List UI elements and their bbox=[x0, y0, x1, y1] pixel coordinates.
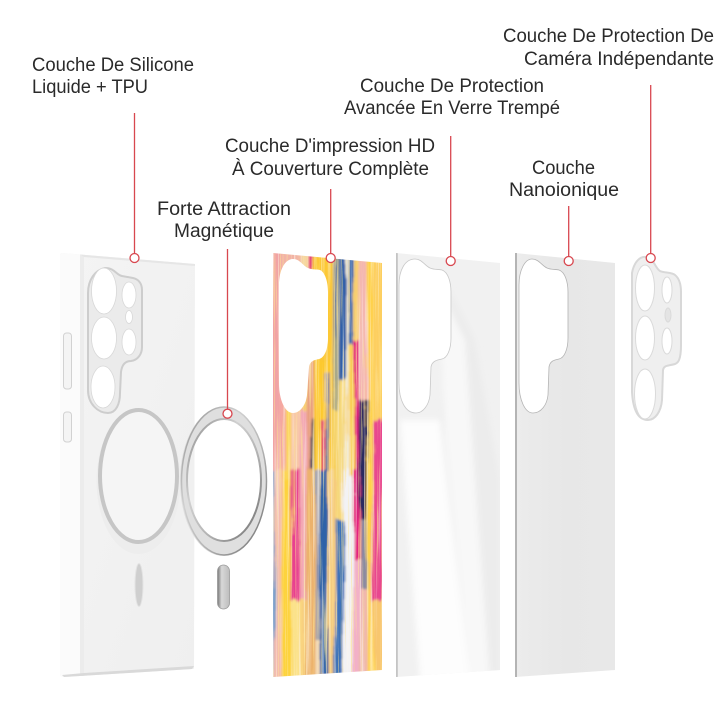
panel: silicone and TPU phone case bbox=[60, 253, 195, 677]
volume button bbox=[64, 333, 72, 389]
glass sheet with reflections bbox=[396, 250, 501, 680]
panel: HD print layer bbox=[273, 253, 382, 677]
case top lip bbox=[80, 254, 195, 266]
label bbox=[225, 136, 435, 180]
fine gold brush streaks bbox=[273, 253, 382, 677]
case bottom lip bbox=[62, 666, 194, 677]
lens frame bbox=[632, 257, 681, 420]
panel: tempered glass layer bbox=[396, 250, 501, 680]
print camera cutout bbox=[279, 259, 328, 413]
callout: tempered glass bbox=[344, 76, 560, 266]
label bbox=[503, 26, 714, 70]
label: Nanoionique bbox=[509, 180, 619, 201]
panel: camera protection layer bbox=[632, 257, 681, 420]
leader line bbox=[446, 136, 455, 266]
callout: camera protection bbox=[503, 26, 714, 262]
label: Couche De Silicone bbox=[32, 55, 194, 76]
metal ring bbox=[180, 407, 266, 556]
magnetic slot on case bbox=[135, 564, 143, 606]
panel: nano-ionic layer bbox=[515, 253, 615, 677]
label: À Couverture Complète bbox=[232, 159, 429, 180]
case side band bbox=[60, 253, 80, 677]
label: Magnétique bbox=[174, 221, 274, 242]
metal pill bbox=[218, 565, 230, 609]
label bbox=[157, 199, 291, 242]
case edge shading bbox=[80, 254, 84, 676]
case body bbox=[60, 253, 195, 677]
leader line bbox=[223, 249, 232, 418]
film sheet bbox=[515, 253, 615, 677]
camera holes bbox=[91, 268, 136, 408]
callout: HD print bbox=[225, 136, 435, 262]
lens holes bbox=[634, 265, 672, 419]
label: Liquide + TPU bbox=[32, 77, 148, 98]
glass camera cutout bbox=[399, 259, 451, 413]
painted stripes bbox=[273, 253, 382, 677]
callout: magnetic attraction bbox=[157, 199, 291, 418]
camera island bbox=[88, 268, 142, 413]
label: Forte Attraction bbox=[157, 199, 291, 220]
callout: silicone case bbox=[32, 55, 194, 262]
leader line bbox=[326, 189, 335, 262]
leader line bbox=[130, 113, 139, 262]
label: Couche De Protection bbox=[360, 76, 544, 97]
leader line bbox=[646, 85, 655, 262]
callout: nano-ionic bbox=[509, 158, 619, 266]
leader line bbox=[564, 206, 573, 266]
power button bbox=[64, 412, 72, 442]
film camera cutout bbox=[519, 259, 568, 413]
label: Couche De Protection De bbox=[503, 26, 714, 47]
panel: magnetic ring bbox=[180, 407, 266, 609]
label: Couche bbox=[532, 158, 595, 179]
magnetic recess on case bbox=[96, 408, 180, 554]
film left edge bbox=[515, 253, 517, 677]
label: Caméra Indépendante bbox=[524, 49, 714, 70]
fine pale brush streaks bbox=[273, 253, 382, 677]
label bbox=[32, 55, 194, 98]
label bbox=[509, 158, 619, 201]
label: Avancée En Verre Trempé bbox=[344, 98, 560, 119]
label: Couche D'impression HD bbox=[225, 136, 435, 157]
label bbox=[344, 76, 560, 119]
